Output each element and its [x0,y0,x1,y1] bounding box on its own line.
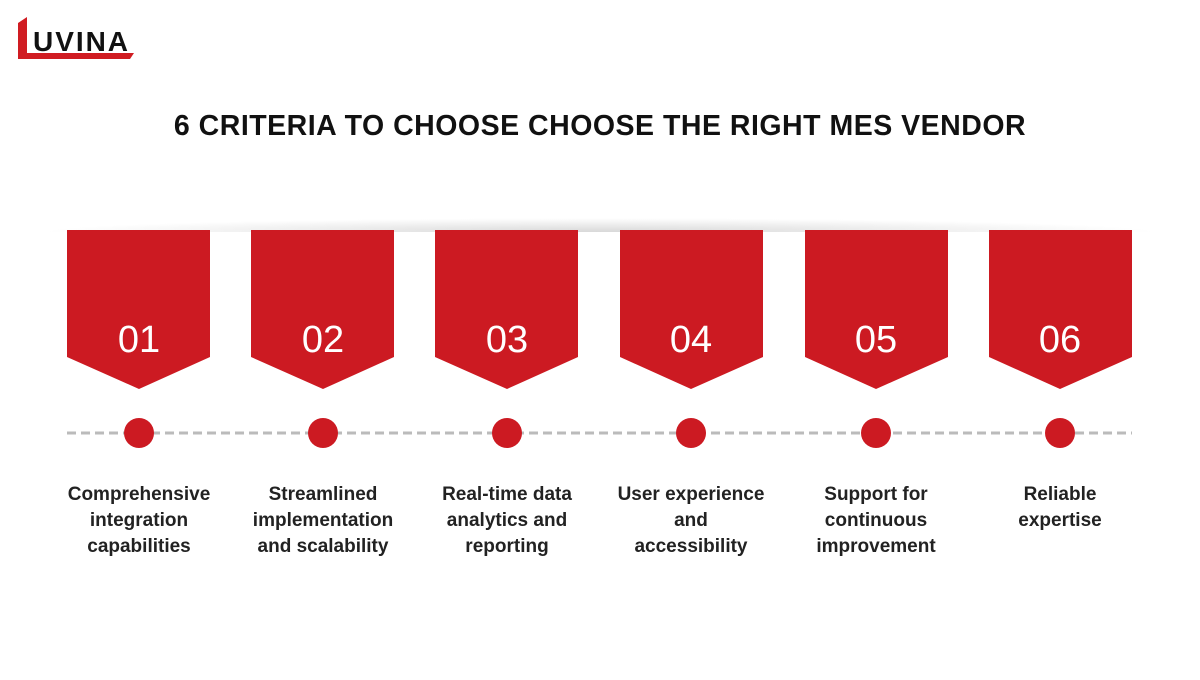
label 4: User experience [618,484,764,505]
banner 05: 05 [855,319,897,361]
logo [18,17,134,59]
label 1: Comprehensive integration capabilities [68,484,210,557]
banner 02 [251,230,394,448]
banner 05 [805,230,948,448]
banner 04: 04 [670,319,712,361]
label 2: Streamlined implementation and scalability [253,484,393,557]
logo: UVINA [33,26,128,57]
label 5: Support for continuous improvement [816,484,936,557]
label 4: accessibility [634,536,748,557]
label 3: Real-time data analytics and reporting [442,484,572,557]
banner 01: 01 [118,319,160,361]
banner 01 [67,230,210,448]
label 6: Reliable expertise [1018,484,1102,531]
banner 04 [620,230,763,448]
banner 03: 03 [486,319,528,361]
banner 06 [989,230,1132,448]
banner 03 [435,230,578,448]
label 4: and [674,510,708,531]
label 4 [618,484,764,557]
banner 06: 06 [1039,319,1081,361]
title: 6 CRITERIA TO CHOOSE CHOOSE THE RIGHT MES VENDOR [174,110,1026,142]
banner 02: 02 [302,319,344,361]
shadow strip [40,218,1160,232]
